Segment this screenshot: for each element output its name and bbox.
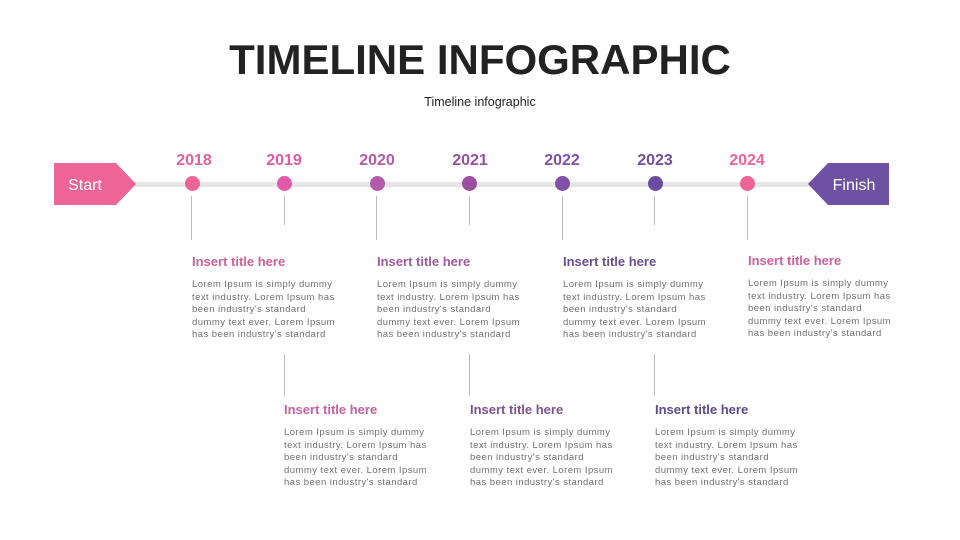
card 2018: Insert title here (192, 254, 285, 269)
start tag (54, 163, 136, 205)
subtitle: Timeline infographic (424, 95, 536, 109)
finish tag: Finish (833, 177, 875, 194)
card 2024: Insert title here (748, 253, 841, 268)
card 2020: Insert title here (377, 254, 470, 269)
text: 2024 (729, 152, 765, 169)
title: TIMELINE INFOGRAPHIC (229, 36, 731, 83)
dots (185, 176, 200, 191)
text: 2019 (266, 152, 302, 169)
card 2019: Lorem Ipsum is simply dummy text industry. Lorem Ipsum has been industry's standard dummy text ever. Lorem Ipsum has been industry's standard (284, 427, 427, 488)
card 2021: Lorem Ipsum is simply dummy text industry. Lorem Ipsum has been industry's standard dummy text ever. Lorem Ipsum has been industry's standard (470, 427, 613, 488)
card 2020: Lorem Ipsum is simply dummy text industry. Lorem Ipsum has been industry's standard dummy text ever. Lorem Ipsum has been industry's standard (377, 279, 520, 340)
finish tag (808, 163, 889, 205)
text: 2021 (452, 152, 488, 169)
card 2018: Lorem Ipsum is simply dummy text industry. Lorem Ipsum has been industry's standard dummy text ever. Lorem Ipsum has been industry's standard (192, 279, 335, 340)
text: 2022 (544, 152, 580, 169)
card 2022: Insert title here (563, 254, 656, 269)
timeline line (130, 182, 820, 187)
card 2024: Lorem Ipsum is simply dummy text industry. Lorem Ipsum has been industry's standard dummy text ever. Lorem Ipsum has been industry's standard (748, 278, 891, 339)
card 2019: Insert title here (284, 402, 377, 417)
card 2022: Lorem Ipsum is simply dummy text industry. Lorem Ipsum has been industry's standard dummy text ever. Lorem Ipsum has been industry's standard (563, 279, 706, 340)
card 2021: Insert title here (470, 402, 563, 417)
card 2023: Lorem Ipsum is simply dummy text industry. Lorem Ipsum has been industry's standard dummy text ever. Lorem Ipsum has been industry's standard (655, 427, 798, 488)
years: 2018 (176, 152, 212, 169)
connectors (191, 196, 192, 240)
text: 2020 (359, 152, 395, 169)
card 2023: Insert title here (655, 402, 748, 417)
start tag: Start (68, 177, 102, 194)
text: 2023 (637, 152, 673, 169)
